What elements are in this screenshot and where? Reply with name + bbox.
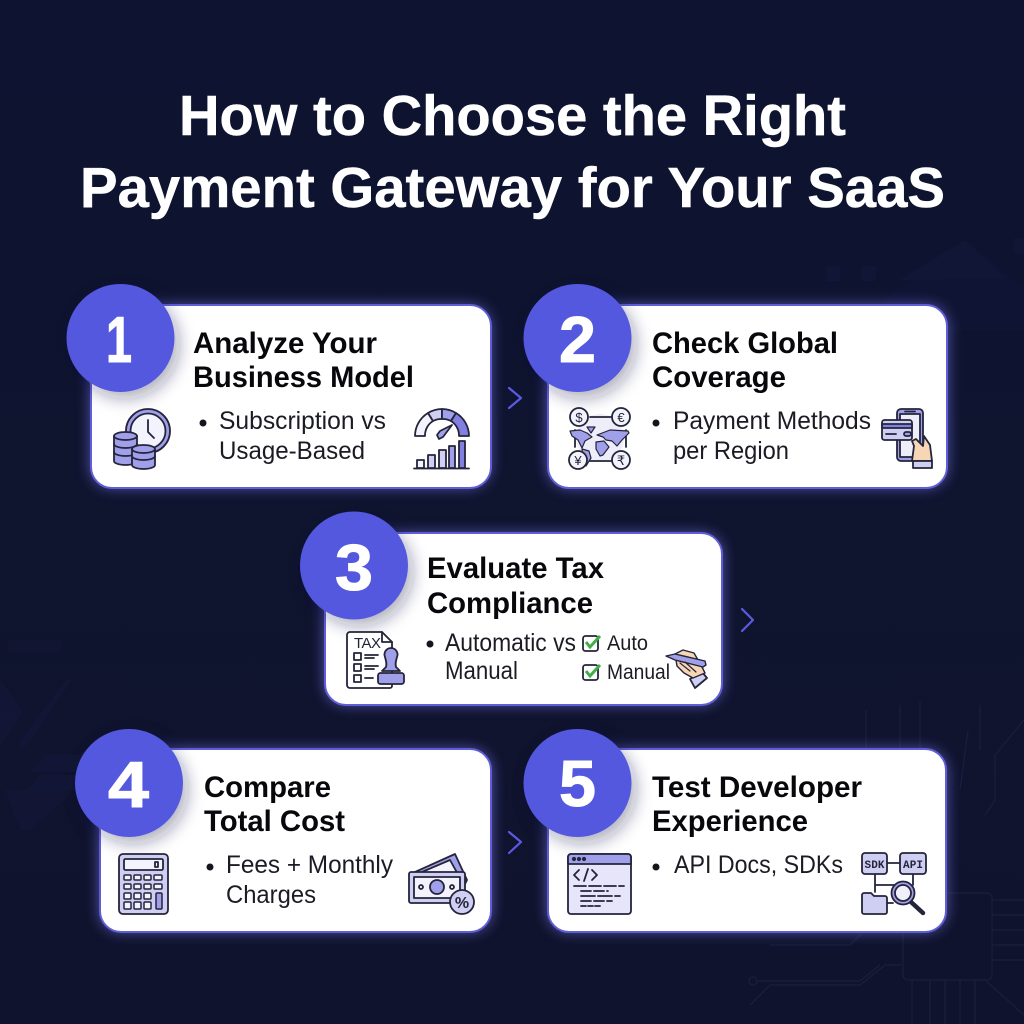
panel: step 2: Payment Methods [673,407,871,435]
panel: step 5 [524,729,947,932]
panel: step 1: Analyze Your [193,327,377,360]
panel: step 2: Check Global [652,327,838,360]
icon: world map with currencies: $ [575,410,583,425]
panel: step 1: Subscription vs [219,407,386,435]
background pattern: geometric shapes and circuit lines [0,238,1024,1024]
icon: world map with currencies: € [617,410,625,425]
icon: banknotes and percent [409,854,474,914]
panel: step 4: 4 [108,748,149,821]
panel: step 4 [75,729,492,932]
title: Payment Gateway for Your SaaS [80,156,945,220]
panel: step 4: Charges [226,881,316,909]
icon: gauge and bars [414,409,469,468]
icon: checkbox auto [583,636,600,651]
panel: step 2: 2 [559,303,596,376]
arrow: step 1 to step 2 [509,388,521,408]
panel: step 4: Total Cost [204,805,345,838]
panel: step 3: 3 [335,531,373,604]
icon: hand with pen [666,650,707,688]
icon: SDK and API diagram: SDK [864,860,885,872]
panel: step 1: 1 [106,303,132,376]
icon: tax form and stamp: TAX [354,635,381,652]
panel: step 3: Compliance [427,587,593,620]
panel: step 3: Auto [607,632,648,655]
icon: world map with currencies: ₹ [617,454,625,469]
panel: step 1: Business Model [193,361,414,394]
panel: step 5: 5 [559,747,596,820]
icon: checkbox manual [583,665,600,680]
arrow: step 3 onward [742,609,753,631]
arrow: step 4 to step 5 [509,832,521,853]
panel: step 2: per Region [673,437,789,465]
panel: step 3: Automatic vs [445,629,576,657]
title: How to Choose the Right [179,84,846,148]
icon: clock and coins [114,409,170,469]
panel: step 3: Manual [607,661,670,684]
icon: code window [568,854,631,914]
title [80,84,945,220]
icon: world map with currencies: ¥ [573,453,582,468]
icon: calculator [119,854,168,914]
icon: banknotes and percent: % [455,895,469,912]
panel: step 5: Test Developer [652,771,862,804]
icon: SDK and API diagram: API [903,860,923,872]
panel: step 1 [66,284,491,488]
panel: step 2: Coverage [652,361,786,394]
icon: phone, card and hand [882,409,932,468]
panel: step 4: Fees + Monthly [226,851,393,879]
panel: step 5: Experience [652,805,808,838]
panel: step 3 [300,512,723,705]
panel: step 3: Manual [445,657,518,685]
panel: step 3: Evaluate Tax [427,552,604,585]
panel: step 5: API Docs, SDKs [674,851,843,879]
panel: step 2 [524,284,948,488]
icon: world map with currencies [569,408,630,469]
icon: SDK and API diagram [862,853,926,914]
icon: tax form and stamp [347,632,404,688]
panel: step 4: Compare [204,771,331,804]
panel: step 1: Usage-Based [219,437,365,465]
